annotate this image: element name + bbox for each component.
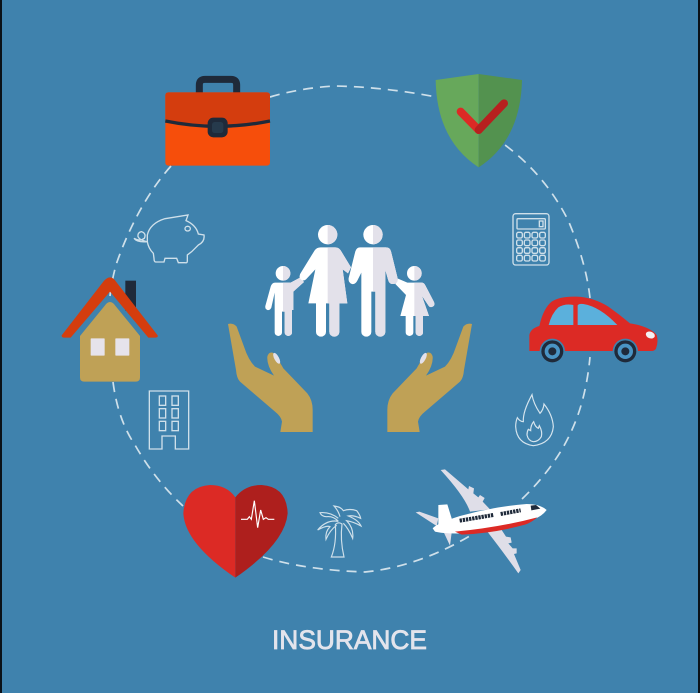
icon: piggy bank outline [134, 215, 204, 263]
icon: shield with check [436, 74, 522, 167]
icon: palm tree outline [318, 506, 361, 557]
icon: heart with pulse [183, 485, 288, 578]
pulse line [241, 501, 274, 528]
family figures [265, 225, 434, 337]
icon: family in cupped hands [228, 225, 472, 432]
icon: airplane [416, 469, 547, 573]
icon: briefcase [165, 79, 270, 166]
icon: flame outline [516, 395, 553, 446]
icon: red car [529, 297, 658, 364]
icon: house [62, 277, 158, 382]
icon: calculator outline [513, 214, 549, 265]
left hand [228, 324, 313, 432]
title: INSURANCE [272, 625, 427, 655]
right hand [387, 324, 472, 432]
dashed ring connecting icons [110, 86, 590, 572]
check mark [461, 112, 479, 130]
icon: building outline [149, 391, 189, 449]
fuselage [433, 504, 547, 533]
